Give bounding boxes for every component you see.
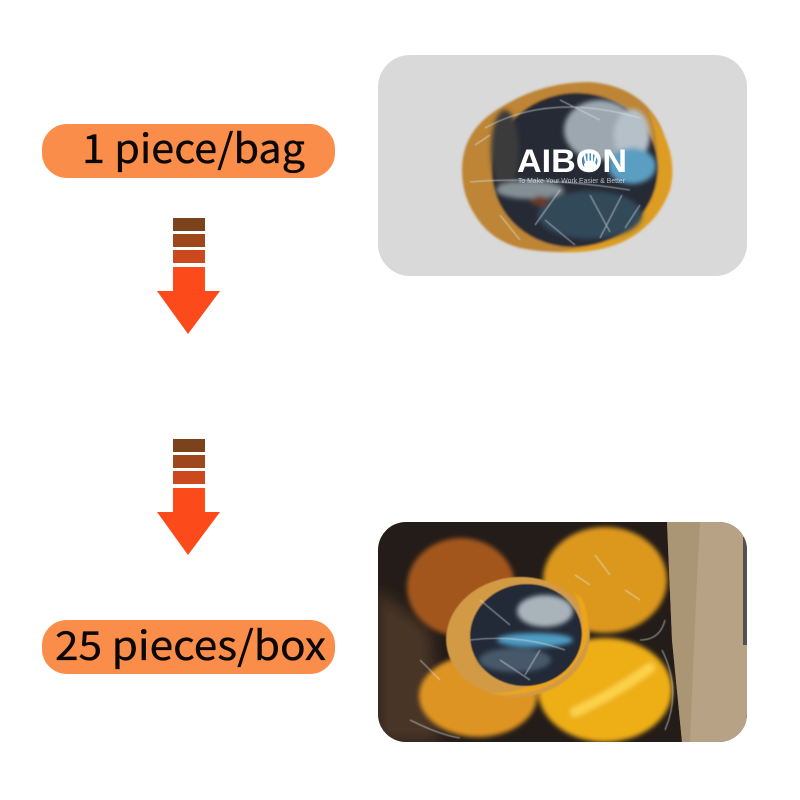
photo: single helmet in bag bbox=[378, 55, 747, 276]
label pill: 25 pieces/box: 25 pieces/box bbox=[55, 614, 326, 672]
photo: helmets in cardboard box bbox=[378, 522, 747, 742]
logo: AIBON: To Make Your Work Easier & Better bbox=[518, 176, 625, 185]
label pill: 1 piece/bag bbox=[42, 117, 335, 178]
arrow: down to box bbox=[157, 439, 220, 555]
center helmet bbox=[445, 576, 591, 698]
label pill: 1 piece/bag: 1 piece/bag bbox=[82, 117, 305, 175]
box flap bbox=[667, 522, 747, 742]
arrow: down from bag bbox=[157, 218, 220, 334]
logo: AIBON: AIBON bbox=[517, 143, 627, 179]
